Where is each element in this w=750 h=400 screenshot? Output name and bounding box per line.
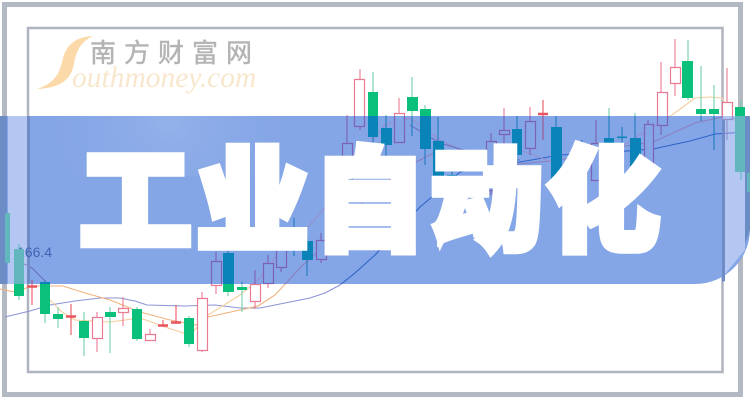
watermark: southmoney logo [37,33,260,94]
logo swoosh [37,36,93,89]
banner band [0,116,750,284]
candlesticks at band edges [5,116,750,284]
logo Chinese name: 南方财富网 [90,33,260,70]
inner frame [28,28,722,372]
title: 工业自动化 [80,140,664,265]
price label: 166.4 [17,244,52,260]
candlestick chart under band [30,116,722,284]
candlestick chart above and below band [0,39,750,356]
logo URL: outhmoney.com [72,62,256,94]
